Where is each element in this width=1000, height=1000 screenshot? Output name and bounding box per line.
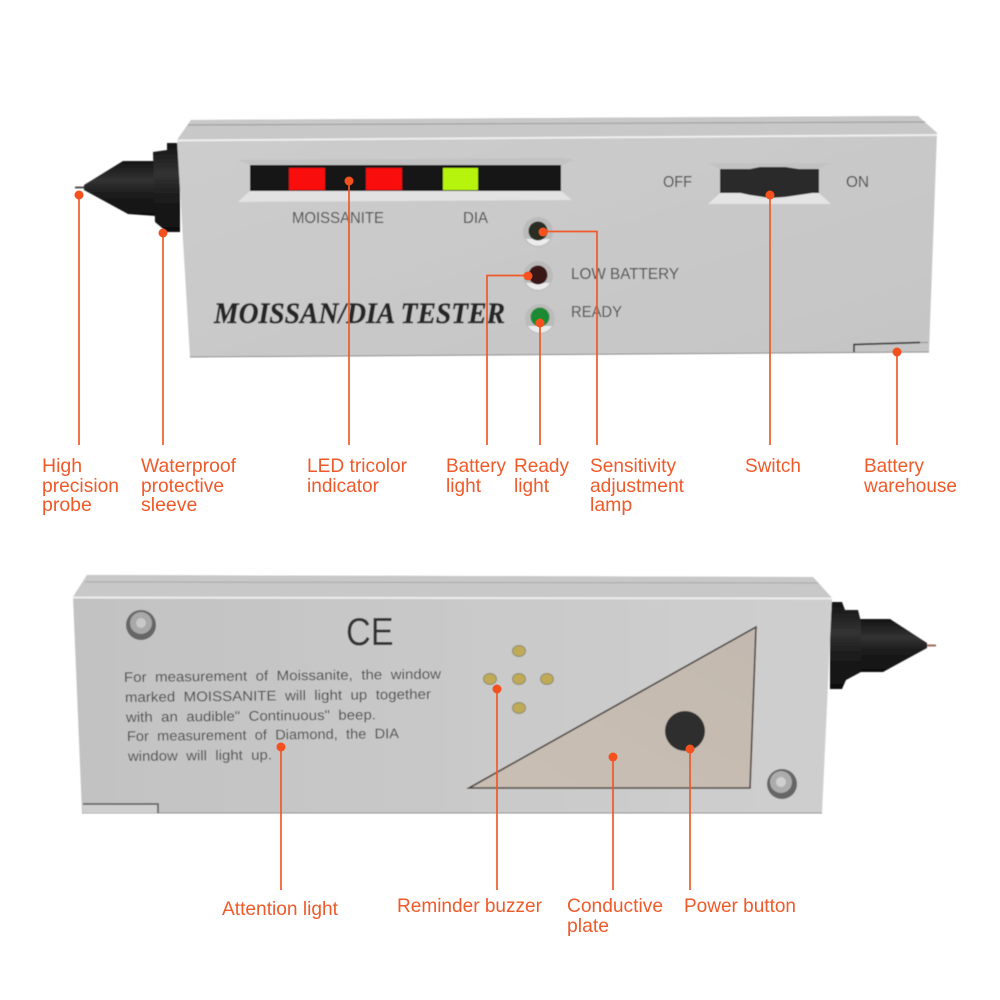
callout: sensitivity adjustment lamp: adjustment xyxy=(590,475,685,497)
callout: high precision probe: precision xyxy=(42,475,119,497)
callout: ready light: light xyxy=(514,475,550,497)
device body xyxy=(73,575,832,813)
device body xyxy=(177,116,937,357)
callout: LED tricolor indicator: LED tricolor xyxy=(307,455,407,477)
callout: reminder buzzer xyxy=(397,684,542,917)
power switch xyxy=(663,163,869,204)
callout: sensitivity adjustment lamp xyxy=(538,228,685,516)
callout: LED tricolor indicator: indicator xyxy=(307,475,379,497)
lamp labels: READY xyxy=(571,304,622,321)
callout: battery warehouse: warehouse xyxy=(863,475,957,497)
power button xyxy=(665,711,705,751)
callout: high precision probe: High xyxy=(42,455,82,477)
device: front view xyxy=(75,116,937,357)
callout: sensitivity adjustment lamp: lamp xyxy=(590,494,632,516)
callout: high precision probe: probe xyxy=(42,494,92,516)
screw: bottom right xyxy=(767,769,797,799)
CE mark: CE xyxy=(346,610,394,653)
device: back view xyxy=(73,575,936,813)
instructions text: For measurement of Moissanite, the window xyxy=(124,666,442,685)
callout: waterproof protective sleeve: protective xyxy=(141,475,224,497)
callout: waterproof protective sleeve: sleeve xyxy=(141,494,197,516)
screw: top left xyxy=(126,610,156,640)
callout: attention light: Attention light xyxy=(222,898,339,920)
instructions text: with an audible" Continuous" beep. xyxy=(125,706,376,725)
callout: switch xyxy=(745,190,801,477)
callout: battery warehouse: Battery xyxy=(864,455,924,477)
LED labels xyxy=(292,210,488,227)
callout: battery warehouse xyxy=(863,348,957,497)
power switch: OFF xyxy=(663,174,692,191)
instructions text: window will light up. xyxy=(127,746,272,764)
buzzer holes xyxy=(484,646,554,714)
callout: battery light xyxy=(446,272,532,497)
LED window xyxy=(238,158,574,202)
callout: sensitivity adjustment lamp: Sensitivity xyxy=(590,455,676,477)
lamp labels: LOW BATTERY xyxy=(571,266,679,283)
callout: reminder buzzer: Reminder buzzer xyxy=(397,895,542,917)
power switch: ON xyxy=(846,174,869,191)
instructions text: For measurement of Diamond, the DIA xyxy=(127,725,400,744)
callout: power button: Power button xyxy=(684,895,796,917)
callout: ready light xyxy=(514,318,569,497)
indicator lamps xyxy=(523,217,555,334)
callout: battery light: light xyxy=(446,475,482,497)
callout: ready light: Ready xyxy=(514,455,569,477)
callout: power button xyxy=(684,744,796,917)
callout: battery light: Battery xyxy=(446,455,506,477)
callout: switch: Switch xyxy=(745,455,801,477)
callout: LED tricolor indicator xyxy=(307,176,407,497)
LED labels: DIA xyxy=(463,210,488,227)
battery door xyxy=(854,342,928,352)
callout: conductive plate: Conductive xyxy=(567,895,663,917)
callout: waterproof protective sleeve: Waterproof xyxy=(141,455,237,477)
model name: MOISSAN/DIA TESTER xyxy=(213,297,505,330)
callout: high precision probe xyxy=(42,190,119,516)
callout: attention light xyxy=(222,742,339,920)
callout: conductive plate: plate xyxy=(567,915,609,937)
probe tip and sleeve xyxy=(75,143,180,232)
instructions text xyxy=(124,666,442,764)
callout: waterproof protective sleeve xyxy=(141,228,237,516)
probe tip and sleeve xyxy=(830,602,936,689)
instructions text: marked MOISSANITE will light up together xyxy=(125,686,431,705)
LED labels: MOISSANITE xyxy=(292,210,384,227)
battery door xyxy=(83,804,158,813)
conductive plate xyxy=(469,627,756,788)
lamp labels xyxy=(571,266,679,321)
callout: conductive plate xyxy=(567,752,663,937)
